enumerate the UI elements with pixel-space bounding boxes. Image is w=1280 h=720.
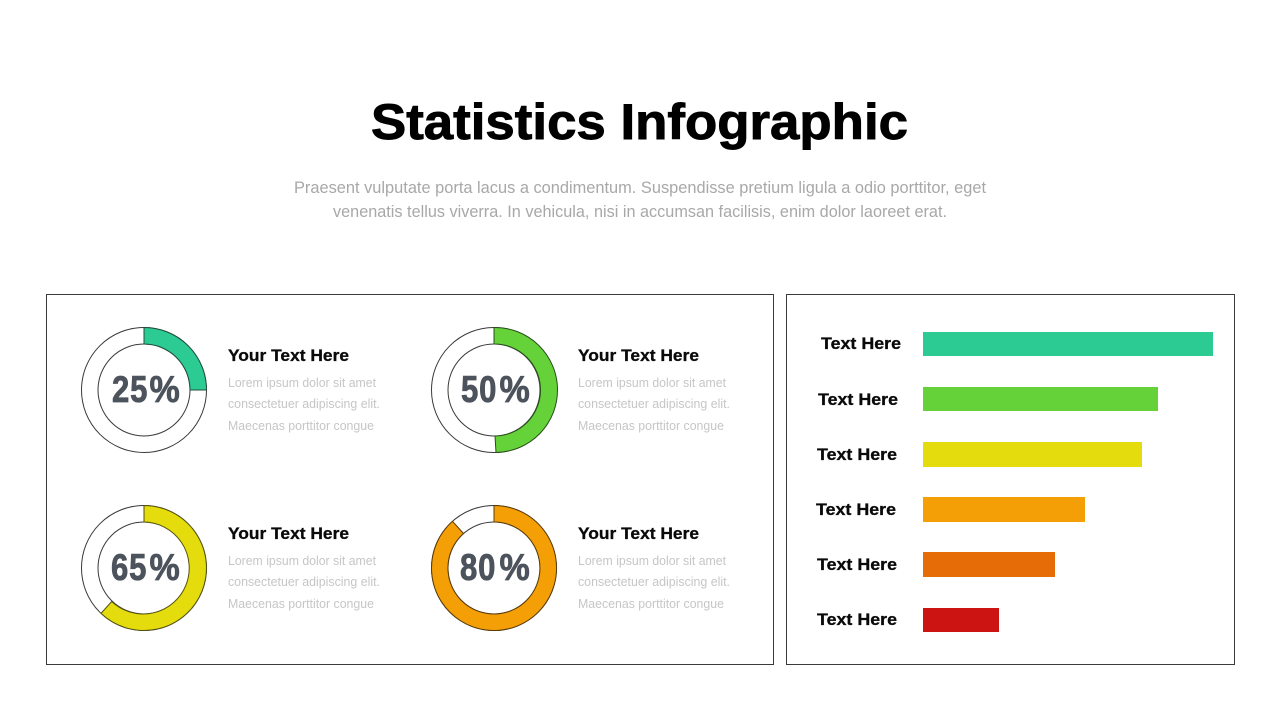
donut chart: 50%: % (500, 369, 531, 410)
stat: 25 percent (82, 328, 380, 452)
text block: 25 percent: Your Text Here (228, 347, 349, 365)
donut chart: 50% (432, 327, 558, 452)
title: Statistics Infographic (371, 94, 908, 150)
text block: 50 percent (578, 347, 730, 433)
text block: 25 percent (228, 347, 380, 433)
text block: 25 percent: Maecenas porttitor congue (228, 419, 374, 433)
donut chart: 50%: 50 (461, 370, 497, 411)
bar row 6: red (817, 608, 999, 632)
donut chart: 80%: % (500, 547, 531, 588)
text block: 65 percent: Your Text Here (228, 525, 349, 543)
bar row 1: teal (821, 332, 1213, 356)
donut chart: 25% (82, 328, 207, 452)
bar row 5: orange (817, 552, 1055, 577)
text block: 50 percent: Your Text Here (578, 347, 699, 365)
donut chart: 80%: 80 (460, 548, 496, 589)
text block: 50 percent: Maecenas porttitor congue (578, 419, 724, 433)
text block: 80 percent: Maecenas porttitor congue (578, 597, 724, 611)
bar row 3: yellow (817, 442, 1142, 467)
donut chart: 65%: % (150, 547, 181, 588)
bar row 2: green (818, 387, 1158, 411)
text block: 65 percent: Maecenas porttitor congue (228, 597, 374, 611)
text block: 65 percent: consectetuer adipiscing elit. (228, 575, 380, 589)
text block: 50 percent: consectetuer adipiscing elit. (578, 397, 730, 411)
bar row 3: yellow: Text Here (817, 446, 897, 464)
bar row 4: amber (816, 497, 1085, 522)
bar row 5: orange: Text Here (817, 556, 897, 574)
text block: 80 percent: consectetuer adipiscing elit. (578, 575, 730, 589)
stat: 65 percent (82, 506, 380, 630)
panel: bar chart (786, 294, 1234, 664)
subtitle text block (294, 179, 986, 221)
text block: 25 percent: consectetuer adipiscing elit. (228, 397, 380, 411)
text block: 50 percent: Lorem ipsum dolor sit amet (578, 376, 727, 390)
donut chart: 25%: 25 (112, 370, 148, 411)
text block: 25 percent: Lorem ipsum dolor sit amet (228, 376, 377, 390)
bar row 6: red: Text Here (817, 611, 897, 629)
subtitle text block: Praesent vulputate porta lacus a condimentum. Suspendisse pretium ligula a odio porttitor, eget (294, 179, 986, 197)
stat: 50 percent (432, 327, 730, 452)
stat: 80 percent (432, 506, 730, 630)
text block: 65 percent (228, 525, 380, 611)
donut chart: 80% (432, 506, 557, 630)
text block: 80 percent: Lorem ipsum dolor sit amet (578, 554, 727, 568)
text block: 80 percent: Your Text Here (578, 525, 699, 543)
donut chart: 25%: % (150, 369, 181, 410)
text block: 80 percent (578, 525, 730, 611)
bar row 4: amber: Text Here (816, 501, 896, 519)
panel: donut statistics (46, 294, 774, 664)
donut chart: 65%: 65 (111, 548, 147, 589)
donut chart: 65% (82, 506, 207, 630)
subtitle text block: venenatis tellus viverra. In vehicula, nisi in accumsan facilisis, enim dolor laoreet erat. (333, 203, 947, 221)
text block: 65 percent: Lorem ipsum dolor sit amet (228, 554, 377, 568)
bar row 1: teal: Text Here (821, 335, 901, 353)
bar row 2: green: Text Here (818, 391, 898, 409)
